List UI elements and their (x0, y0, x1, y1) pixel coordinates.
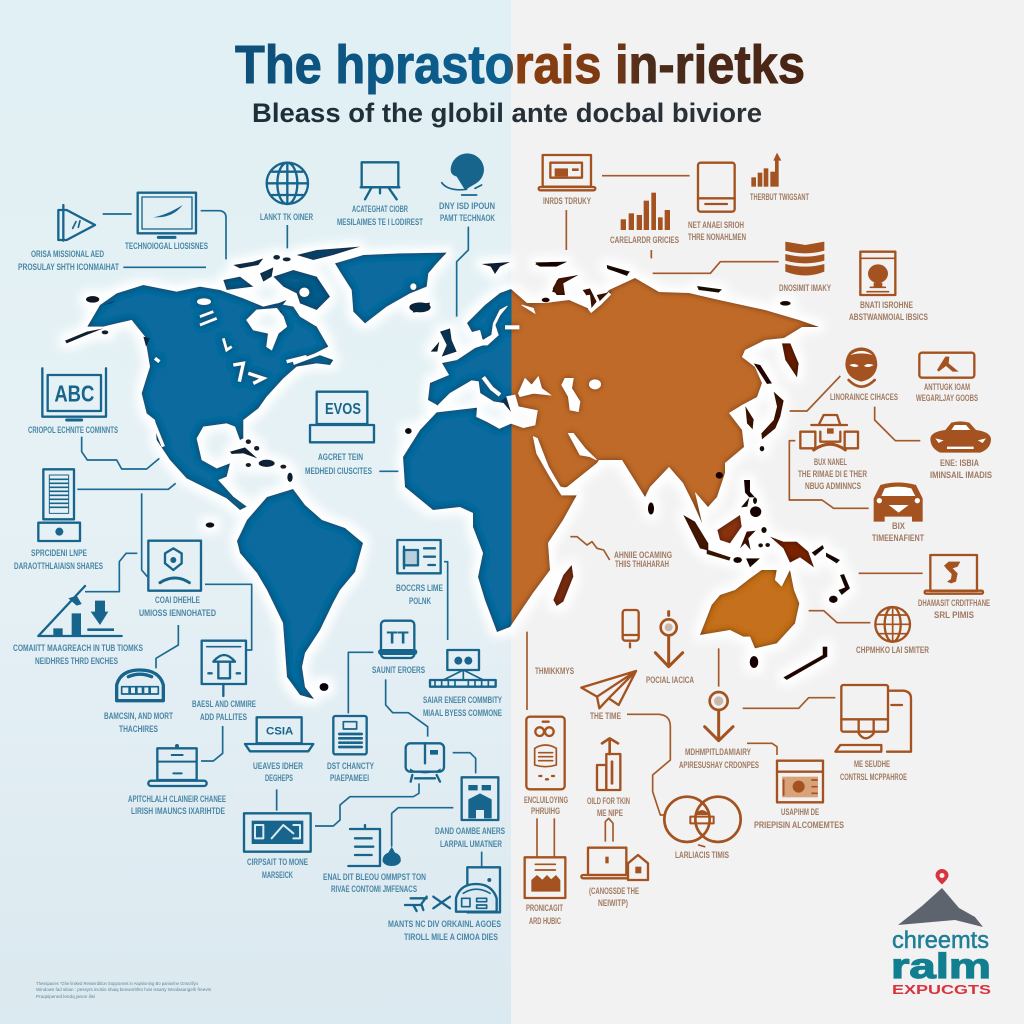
caption: clipboard: ENAL DIT BLEOU OMMPST TON (323, 872, 426, 882)
icon: presentation board (361, 162, 399, 199)
caption: large phone: ENCLUILOYING (524, 795, 568, 805)
icon: laptop with label: CSIA (266, 726, 293, 738)
icon: tablet (698, 163, 735, 212)
icon: pin arrow large (705, 692, 733, 741)
logo: wordmark tag: EXPUCGTS (892, 982, 991, 997)
caption: avatar window: ABSTWANMOIAL IBSICS (849, 312, 928, 322)
caption: tower: ME NIPE (597, 808, 623, 818)
caption: people box: ARD HUBIC (529, 916, 561, 926)
logo: wordmark main: ralm (891, 947, 991, 986)
caption: large phone (524, 795, 568, 816)
caption: framed shield: COAI DHEHLE (155, 595, 200, 605)
caption: board: ACATEGHAT CIOBR (352, 204, 408, 214)
icon: masked face (845, 347, 877, 387)
caption: globe: CHPMHKO LAI SMITER (856, 645, 929, 655)
caption: vehicle group: NBUG ADMINNCS (805, 481, 861, 491)
islands: East Asia (535, 262, 799, 514)
caption: tablet: SAUNIT EROERS (372, 665, 425, 675)
icon: laptop with figure (925, 555, 983, 594)
icon: photo window (777, 761, 823, 802)
caption: laptop tag (589, 886, 639, 908)
caption: Africa note: AHNIIE OCAMING (614, 550, 672, 560)
caption: laptop: APITCHLALH CLAINEIR CHANEE (128, 794, 226, 804)
icon: laptop and tag (581, 848, 648, 880)
caption: head: DNY ISD IPOUN (439, 201, 495, 211)
footnote: Praqsipened lendq janon ilisi (36, 994, 95, 999)
caption: plane: THE TIME (590, 711, 621, 721)
caption: device: MIAAL BYESS COMMONE (423, 708, 502, 718)
caption: face: LINORAINCE CIHACES (830, 392, 898, 402)
caption: sign: ANTTUGK IOAM (924, 382, 970, 392)
panel: left blue background (0, 0, 511, 1024)
caption: avatar window: BNATI ISROHNE (860, 300, 913, 310)
islands: Indonesia and Pacific (648, 480, 850, 680)
caption: machine (192, 699, 256, 722)
icon: large phone (526, 717, 565, 789)
caption: screen (247, 857, 308, 880)
icon: tablet: TT (387, 627, 409, 647)
caption: computer: ME SEUDHE (854, 759, 890, 769)
orange icons, lower right (525, 555, 983, 898)
icon: building (462, 777, 498, 820)
caption: large pin (679, 747, 759, 770)
caption: laptop figure: DHAMASIT CRDITFHANE (918, 598, 990, 608)
icon: tower building (597, 738, 620, 790)
caption: id card: BOCCRS LIME (396, 583, 443, 593)
caption: board (337, 204, 423, 227)
icon: device with pipes (430, 650, 496, 687)
caption: bar chart: CARELARDR GRICIES (610, 235, 679, 245)
islands: Caribbean and Pacific (65, 296, 431, 528)
caption: growth chart: COMAIITT MAAGREACH IN TUB TIOMKS (13, 643, 143, 653)
connectors: left lower (85, 530, 482, 867)
South America (237, 489, 363, 699)
caption: CSIA laptop: UEAVES IDHER (253, 761, 303, 771)
Greenland (335, 253, 447, 323)
caption: Africa note: THIIS THIAHARAH (615, 559, 669, 569)
icon: framed shield (148, 541, 201, 591)
icon: laptop (148, 744, 207, 786)
icon: globe (875, 607, 910, 642)
caption: laptop figure: SRL PIMIS (934, 610, 974, 620)
icon: radio dome (117, 670, 163, 701)
icon: phone (623, 610, 639, 647)
Falkland islands (320, 683, 328, 691)
logo: map pin (936, 869, 948, 884)
icon: calculator (333, 716, 367, 754)
orange captions (524, 192, 992, 926)
icon: window with avatar (860, 252, 895, 295)
caption: server (14, 548, 103, 571)
subtitle: Bleass of the globil ante docbal biviore (252, 98, 762, 128)
caption: rising bars: THERBUT TWIGSANT (750, 192, 809, 202)
caption: building: DAND OAMBE ANERS (435, 826, 505, 836)
caption: dome: TIROLL MILE A CIMOA DIES (404, 932, 498, 942)
caption: building (435, 826, 505, 849)
caption: sports car: ENE: ISBIA (940, 458, 979, 468)
caption: laptop: LIRISH IMAUNCS IXARIHTDE (131, 806, 225, 816)
icon: server tower (38, 469, 80, 541)
caption: radio: THACHIRES (119, 724, 158, 734)
icon: vehicle group (800, 415, 858, 450)
caption: EVOS (305, 452, 372, 476)
caption: growth chart (13, 643, 143, 666)
icon: EVOS laptop (310, 392, 374, 442)
caption: dome (388, 919, 501, 942)
Arctic islands (223, 247, 360, 315)
caption: head (439, 201, 495, 223)
caption: sign: WEGARLJAY GOOBS (916, 393, 978, 403)
icon: ABC book screen (42, 368, 106, 420)
caption: server: DARAOTTHLAIAISN SHARES (14, 561, 103, 571)
icon: shield arrow (58, 205, 95, 241)
caption: framed shield (139, 595, 216, 618)
logo: wordmark top: chreemts (892, 927, 989, 954)
caption: large pin: MDHMPITLDAMIAIRY (685, 747, 751, 757)
caption: rings: LARLIACIS TIMIS (675, 850, 729, 860)
caption: sign (916, 382, 978, 403)
caption: tablet: THRE NONAHLMEN (688, 232, 746, 242)
caption: car front: BIX (892, 521, 905, 531)
caption: laptop figure (918, 598, 990, 620)
icon: clipboard and plug (348, 825, 401, 866)
caption: CSIA laptop (253, 761, 303, 783)
footnote: Thesspaces "Ghe liniked Resserdition Sopponent in Aspsioning Bo paniorine Gnscrifyo (36, 981, 198, 986)
caption: laptop: INRDS TDRUKY (543, 196, 591, 206)
caption: photo window (754, 807, 844, 830)
footnote: Windows fad sitian : pessyrs incisio shaiq benworithto hvis issarty Woolasangelh freevts (36, 987, 212, 992)
caption: globe: LANKT TK OINER (260, 212, 313, 222)
caption: EVOS: AGCRET TEIN (318, 452, 363, 462)
footnote (36, 981, 212, 999)
icon: tablet (381, 621, 414, 658)
logo (891, 869, 991, 997)
icon: laptop with label (245, 717, 313, 751)
Africa, Europe and Asia split blue/orange (403, 278, 819, 632)
caption: tablet: NET ANAEI SRIOH (688, 220, 744, 230)
caption: Africa note (614, 550, 672, 569)
icon: laptop with window (539, 155, 595, 190)
caption: device (423, 695, 502, 718)
icon: tram (406, 743, 444, 782)
Madagascar (553, 565, 573, 606)
icon: EVOS laptop: EVOS (325, 401, 361, 418)
caption: photo window: PRIEPISIN ALCOMEMTES (754, 820, 844, 830)
icon: paper plane (581, 671, 636, 708)
caption: tower (587, 796, 630, 818)
caption: people box: PRONICAGIT (526, 903, 563, 913)
caption: avatar window (849, 300, 928, 322)
caption: board: MESILAIMES TE I LODIREST (337, 217, 423, 227)
caption: calculator (327, 761, 374, 783)
caption: machine: ADD PALLITES (200, 712, 247, 722)
caption: EVOS: MEDHEDI CIUSCITES (305, 466, 372, 476)
caption: radio: BAMCSIN, AND MORT (104, 711, 173, 721)
caption: shield (18, 249, 119, 272)
caption: small pin: POCIAL IACICA (646, 675, 694, 685)
icon: head with headset (442, 153, 484, 195)
connectors: right lower (527, 537, 923, 857)
world map (65, 247, 850, 699)
caption: machine: BAESL AND CMMIRE (192, 699, 256, 709)
caption: computer: CONTRSL MCPPAHROE (840, 772, 907, 782)
caption: framed shield: UMIOSS IENNOHATED (139, 608, 216, 618)
panel: right grey background (511, 0, 1024, 1024)
caption: dome: MANTS NC DIV ORKAINL AGOES (388, 919, 501, 929)
caption: screen: CIRPSAIT TO MONE (247, 857, 308, 867)
orange icons, upper right (539, 153, 991, 522)
caption: screen: MARSEICK (262, 870, 293, 880)
caption: laptop tag: (CANOSSDE THE (589, 886, 639, 896)
icon: globe (267, 163, 308, 204)
icon: framed chart screen (244, 813, 311, 852)
caption: monitor: TECHNOIOGAL LIOSISNES (125, 241, 208, 251)
title: The hprastorais in-rietks (235, 35, 805, 95)
caption: CSIA laptop: DEGHEPS (265, 773, 293, 783)
caption: side note: THMIKKMYS (535, 666, 574, 676)
icon: ABC book screen: ABC (54, 381, 94, 407)
caption: large pin: APIRESUSHAY CRDONPES (679, 760, 759, 770)
icon: database stack (785, 242, 824, 275)
logo: mountain (898, 888, 983, 927)
caption: vehicle group: THE RIMAE DI E THER (798, 469, 867, 479)
caption: radio (104, 711, 173, 734)
caption: id card (396, 583, 443, 606)
caption: growth chart: NEIDHRES THRD ENCHES (35, 656, 118, 666)
icon: desktop computer (835, 685, 911, 752)
caption: building: LARPAIL UMATNER (440, 839, 502, 849)
caption: people box (526, 903, 563, 926)
caption: laptop tag: NEIWITP) (598, 898, 628, 908)
caption: tablet (688, 220, 746, 242)
caption: database: DNOSIMIT IMAKY (779, 283, 831, 293)
blue icons, lower left (38, 540, 500, 912)
icon: bar chart (621, 193, 670, 230)
caption: device: SAIAR ENEER COMMBITY (423, 695, 502, 705)
caption: id card: POLNK (409, 596, 431, 606)
icon: growth chart (38, 586, 122, 636)
caption: tower: OILD FOR TKIN (587, 796, 630, 806)
icon: monitor with swoosh (138, 193, 196, 237)
caption: car front: TIMEENAFIENT (872, 533, 924, 543)
caption: computer (840, 759, 907, 782)
icon: car front (874, 482, 923, 522)
caption: server: SPRCIDENI LNPE (31, 548, 87, 558)
caption: car front (872, 521, 924, 543)
connectors: left upper (77, 211, 468, 530)
caption: sports car (930, 458, 992, 480)
icon: sports car (930, 421, 991, 453)
caption: large phone: PHRUIHG (531, 806, 560, 816)
islands: Europe and Atlantic (405, 262, 630, 434)
caption: ABC: CRIOPOL ECHNITE COMINNTS (28, 425, 118, 435)
icon: id card (397, 540, 441, 573)
icon: overlapping rings (664, 797, 741, 847)
caption: photo window: USAPIHM DE (781, 807, 819, 817)
caption: vehicle group: BUX NANEL (814, 457, 847, 467)
caption: laptop (128, 794, 226, 816)
caption: shield: PROSULAY SHTH ICONMAIHAT (18, 262, 119, 272)
icon: rising bars (751, 153, 781, 187)
caption: calculator: PIAEPAMEEI (330, 773, 369, 783)
blue captions (13, 201, 505, 942)
icon: pin arrow small (655, 612, 683, 667)
North America (87, 285, 333, 510)
caption: clipboard: RIVAE CONTOMI JMFENACS (331, 884, 417, 894)
icon: people box (525, 857, 565, 898)
connectors: right upper (566, 176, 920, 508)
caption: vehicle group (798, 457, 867, 491)
icon: dome building and wrench (405, 867, 500, 912)
caption: shield: ORISA MISSIONAL AED (31, 249, 104, 259)
blue icons, upper left (38, 153, 484, 541)
caption: head: PAMT TECHNAOK (440, 213, 495, 223)
caption: sports car: IMINSAIL IMADIS (930, 470, 992, 480)
Australia (700, 570, 799, 648)
icon: machine with dome (202, 641, 246, 696)
caption: calculator: DST CHANCTY (327, 761, 374, 771)
caption: clipboard (323, 872, 426, 894)
icon: sign frame (919, 353, 974, 378)
